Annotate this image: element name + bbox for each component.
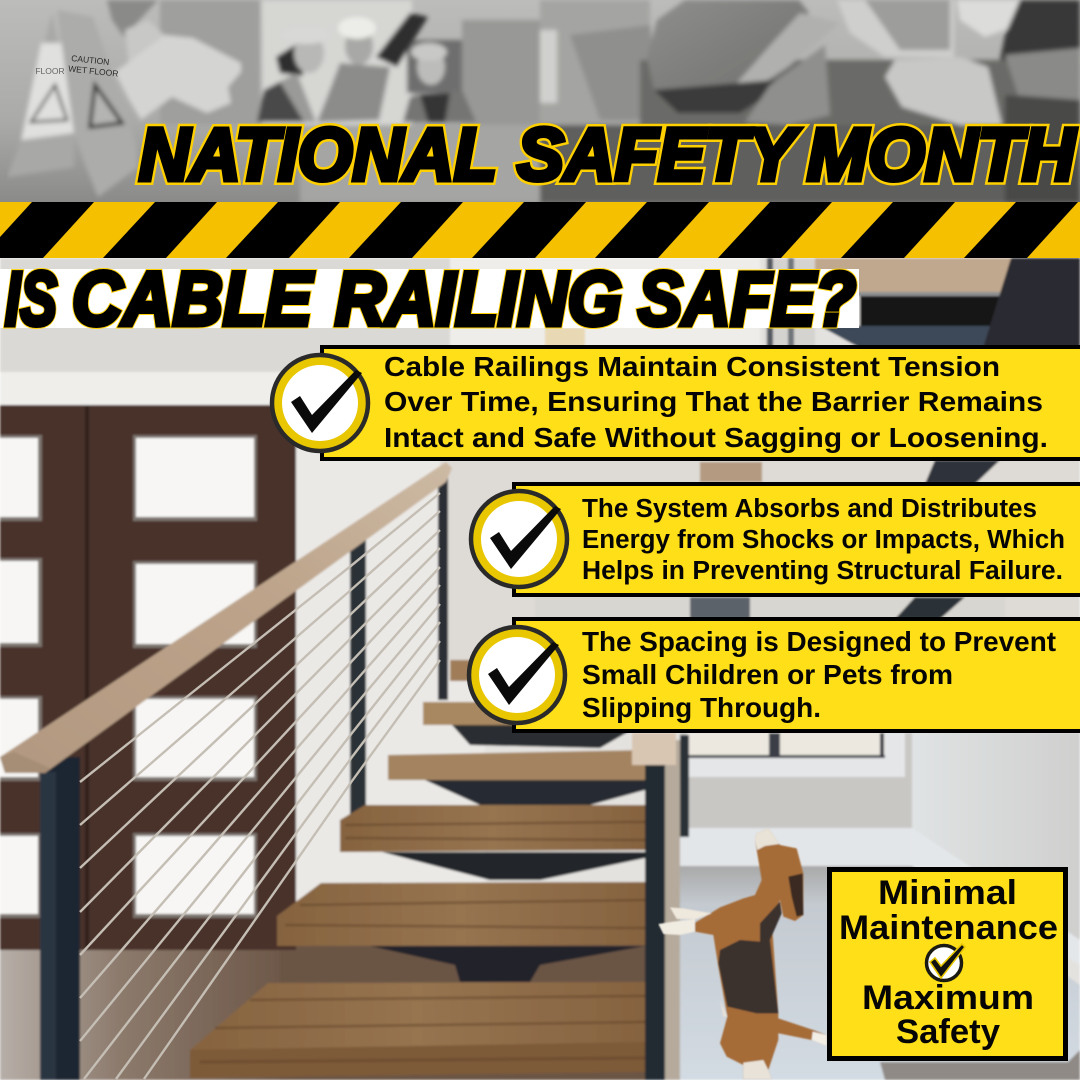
title: national safety month: MONTH [807, 113, 1077, 196]
callout text: Intact and Safe Without Sagging or Loosening. [384, 422, 1048, 453]
heading: is cable railing safe: CABLE [72, 257, 314, 342]
hazard stripe band [0, 202, 1080, 258]
title: national safety month: MONTH [807, 113, 1077, 196]
sign text: CAUTION [71, 53, 110, 67]
cable railing lines [80, 493, 440, 1079]
illustration: beagle standing on hind legs [658, 828, 827, 1079]
heading: is cable railing safe: RAILING [335, 257, 622, 342]
heading: is cable railing safe: IS [5, 257, 57, 342]
title: national safety month: NATIONAL [139, 113, 497, 196]
workers group [257, 13, 540, 125]
callout text: Maximum [862, 979, 1034, 1017]
header photo: workers and safety gear montage [0, 0, 1080, 203]
heading: is cable railing safe [0, 257, 859, 342]
icon: small check badge [926, 944, 965, 980]
icon: check badge [272, 355, 368, 451]
icon: check badge [471, 491, 567, 587]
heading: is cable railing safe: CABLE [72, 257, 314, 342]
callout text: The Spacing is Designed to Prevent [582, 626, 1056, 657]
sign text [35, 53, 119, 79]
photo: staircase interior background [0, 258, 1080, 1080]
callout 2: absorbs energy [471, 484, 1080, 595]
callout text: Maintenance [839, 909, 1058, 947]
title: national safety month: SAFETY [517, 113, 800, 196]
callout text: Safety [896, 1013, 1000, 1051]
icon: check badge [469, 627, 565, 723]
title: national safety month: SAFETY [517, 113, 800, 196]
heading: is cable railing safe: IS [5, 257, 57, 342]
callout text: Energy from Shocks or Impacts, Which [582, 526, 1065, 554]
hard hats [647, 0, 1080, 203]
callout 1: consistent tension [272, 347, 1080, 459]
callout text: The System Absorbs and Distributes [582, 495, 1037, 523]
callout: minimal maintenance, maximum safety [830, 870, 1068, 1058]
hands [107, 0, 241, 120]
heading: is cable railing safe: RAILING [335, 257, 622, 342]
icon: wet floor signs [7, 10, 138, 197]
callout text: Minimal [878, 874, 1017, 912]
callout 3: spacing [469, 619, 1080, 731]
callout text: Cable Railings Maintain Consistent Tension [384, 351, 1000, 382]
title: national safety month [139, 113, 1077, 196]
callout text: Slipping Through. [582, 692, 821, 723]
callout text: Helps in Preventing Structural Failure. [582, 557, 1063, 585]
heading: is cable railing safe: SAFE? [638, 257, 856, 342]
callout text: Small Children or Pets from [582, 659, 953, 690]
sign text: FLOOR [35, 66, 65, 76]
heading: is cable railing safe: SAFE? [638, 257, 856, 342]
sign text: WET FLOOR [68, 63, 119, 79]
title: national safety month: NATIONAL [139, 113, 497, 196]
callout text: Over Time, Ensuring That the Barrier Remains [384, 386, 1043, 417]
